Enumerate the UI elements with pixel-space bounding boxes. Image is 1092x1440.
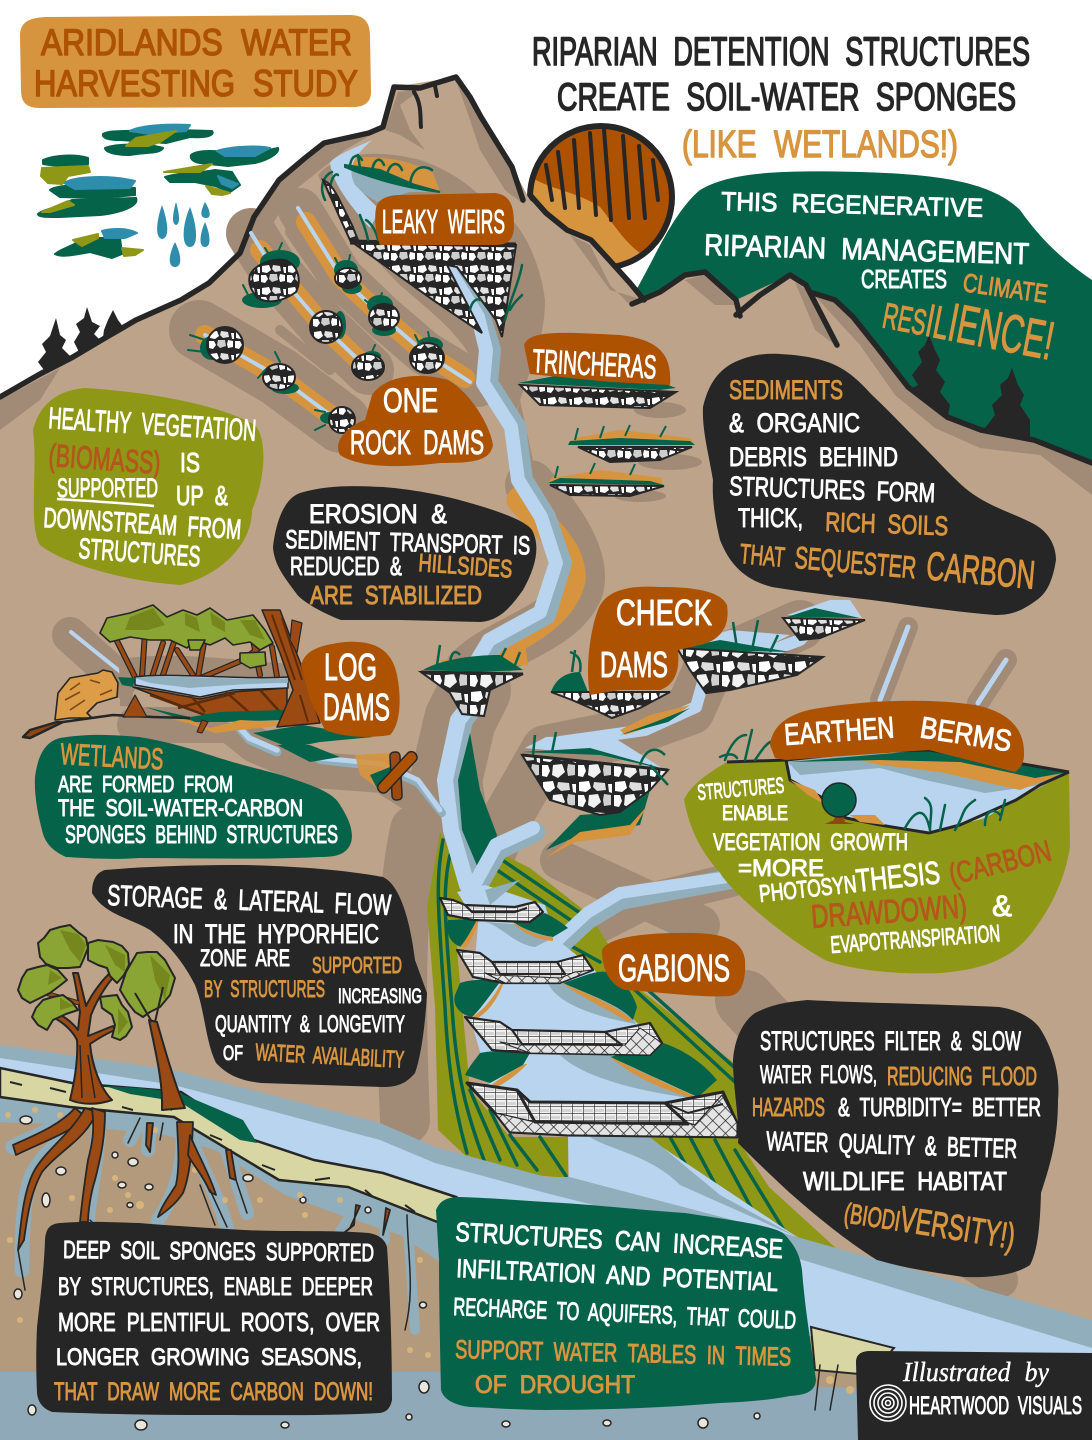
farm field: right side [483, 847, 838, 1250]
panel: this regenerative text: RIPARIAN MANAGEMENT [704, 229, 1030, 271]
tree roots [13, 1108, 838, 1410]
panel: erosion: HILLSIDES [418, 549, 513, 584]
small crossed log dam [355, 750, 419, 800]
panel: infiltration: RECHARGE TO AQUIFERS, THAT COULD [453, 1293, 797, 1335]
main heading [532, 30, 1030, 166]
farm field: left side [427, 832, 568, 1178]
panel: this regenerative text: THIS REGENERATIVE [721, 186, 984, 223]
credit box [856, 1351, 1092, 1440]
panel: healthy vegetation: DOWNSTREAM FROM [43, 502, 242, 545]
panel: structures filter: WATER FLOWS, [760, 1061, 877, 1089]
title badge: HARVESTING STUDY [34, 63, 358, 104]
panel: storage and lateral flow: STORAGE & LATERAL FLOW [107, 880, 392, 922]
panel: vegetation growth text: ENABLE [722, 802, 788, 825]
conifer trees, left ridge [38, 307, 124, 382]
label: log dams: LOG [324, 647, 377, 689]
side streams [71, 627, 1006, 945]
conifer trees, right ridge [905, 335, 1030, 440]
panel: vegetation growth text: VEGETATION GROWTH [713, 829, 908, 856]
panel: vegetation growth text: PHOTOSYNTHESIS [757, 854, 942, 909]
panel: storage and lateral flow: OF [223, 1042, 243, 1065]
panel: storage and lateral flow: INCREASING [338, 985, 422, 1008]
basin shadow bands [485, 880, 797, 1237]
panel: infiltration: INFILTRATION AND POTENTIAL [456, 1253, 779, 1297]
panel: check dams label [588, 587, 728, 695]
earthen berm basin [684, 730, 1070, 973]
panel: storage and lateral flow: QUANTITY & LONGEVITY [215, 1011, 405, 1038]
panel: sediments: RICH SOILS [825, 507, 949, 541]
main river channel [445, 267, 572, 885]
panel: wetlands: ARE FORMED FROM [58, 771, 233, 797]
panel: healthy vegetation: IS [180, 447, 200, 478]
panel: deep soil sponges: LONGER GROWING SEASONS, [56, 1344, 362, 1371]
label: earthen berms [770, 701, 1024, 772]
panel: vegetation growth text: & [992, 890, 1012, 923]
panel: deep soil sponges [36, 1222, 392, 1415]
panel: wetlands: SPONGES BEHIND STRUCTURES [65, 821, 338, 849]
label: log dams [301, 642, 400, 737]
label: log dams: DAMS [323, 687, 390, 729]
label: leaky weirs: LEAKY WEIRS [382, 203, 505, 240]
one rock dams [188, 243, 444, 433]
top stream and grassy bank [322, 140, 440, 228]
panel: infiltration: OF DROUGHT [475, 1371, 635, 1399]
riverbank grass [105, 1086, 257, 1143]
label: one rock dams [338, 376, 493, 466]
soil strip [0, 1068, 894, 1375]
leaky weirs structure [323, 180, 522, 337]
label: gabions: GABIONS [618, 948, 730, 990]
panel: healthy vegetation: SUPPORTED [57, 473, 158, 503]
trincheras terraces [518, 375, 695, 496]
panel: check dams label: DAMS [600, 644, 668, 685]
rain drops [157, 202, 210, 267]
log dam scene with trees and beaver [23, 605, 373, 762]
clouds [38, 125, 278, 258]
green channel tongue [458, 733, 497, 880]
panel: this regenerative text [704, 186, 1059, 372]
panel: erosion: EROSION & [309, 499, 447, 529]
root halos [13, 1112, 415, 1330]
panel: deep soil sponges: DEEP SOIL SPONGES SUPPORTED [63, 1236, 374, 1267]
panel: sediments: THAT SEQUESTER CARBON [738, 528, 1037, 598]
wet soil band [0, 1095, 445, 1262]
title badge [20, 15, 371, 108]
panel: wetlands [35, 735, 352, 859]
panel: deep soil sponges: MORE PLENTIFUL ROOTS, OVER [58, 1307, 380, 1337]
gabion 2 [457, 950, 593, 983]
panel: erosion: REDUCED & [290, 551, 402, 581]
small tree [120, 952, 185, 1110]
label: trincheras: TRINCHERAS [532, 342, 657, 385]
panel: deep soil sponges: BY STRUCTURES, ENABLE DEEPER [58, 1273, 373, 1301]
soil pebbles and dots [14, 1116, 760, 1430]
logo: tree rings [870, 1385, 906, 1421]
main check dam [421, 640, 528, 716]
panel: wetlands: THE SOIL-WATER-CARBON [58, 795, 303, 822]
panel: infiltration [436, 1197, 816, 1410]
gabion 4 [467, 1083, 737, 1137]
large tree [18, 925, 132, 1104]
panel: sediments: THICK, [738, 503, 803, 533]
panel: sediments [703, 354, 1056, 615]
upper check dams [551, 600, 865, 735]
panel: healthy vegetation: STRUCTURES [78, 533, 201, 573]
label: one rock dams: ROCK DAMS [350, 424, 484, 462]
label: gabions [602, 933, 745, 996]
panel: sediments: SEDIMENTS [729, 375, 843, 405]
gabion basin water [457, 885, 797, 1237]
panel: storage and lateral flow: BY STRUCTURES [204, 976, 325, 1003]
panel: healthy vegetation: (BIOMASS) [48, 437, 162, 481]
panel: erosion: ARE STABILIZED [310, 580, 482, 610]
gabion structures [440, 898, 737, 1137]
panel: sediments: DEBRIS BEHIND [729, 442, 898, 472]
panel: infiltration: STRUCTURES CAN INCREASE [455, 1217, 784, 1264]
panel: storage and lateral flow: ZONE ARE [200, 945, 290, 972]
panel: infiltration: SUPPORT WATER TABLES IN TIMES [455, 1334, 791, 1372]
hillside river [0, 1045, 1092, 1360]
label: leaky weirs [375, 193, 514, 245]
label: earthen berms: EARTHEN [783, 711, 895, 752]
panel: structures filter: (BIODIVERSITY!) [842, 1189, 1018, 1257]
gabion 3 [465, 1017, 662, 1055]
ridge lines [0, 77, 1092, 463]
main heading: (LIKE WETLANDS!) [682, 124, 958, 166]
panel: storage and lateral flow: IN THE HYPORHEIC [173, 919, 379, 949]
basin vegetation patches [447, 913, 717, 1098]
panel: sediments: STRUCTURES FORM [729, 471, 936, 508]
label: earthen berms: BERMS [918, 711, 1014, 758]
green sky panel [630, 171, 1092, 490]
panel: vegetation growth text: DRAWDOWN) [810, 887, 968, 935]
lower check dam [522, 732, 668, 858]
panel: this regenerative text: CLIMATE [961, 267, 1050, 309]
panel: vegetation growth text: =MORE [738, 855, 824, 882]
label: one rock dams: ONE [383, 382, 438, 420]
panel: deep soil sponges: THAT DRAW MORE CARBON DOWN! [54, 1378, 373, 1406]
panel: storage and lateral flow: WATER AVAILABILITY [255, 1039, 405, 1074]
panel: vegetation growth text [696, 772, 1055, 959]
credit box: Illustrated by [902, 1357, 1049, 1387]
panel: healthy vegetation [33, 388, 263, 585]
sun [527, 123, 675, 268]
panel: storage and lateral flow: SUPPORTED [312, 952, 402, 978]
panel: healthy vegetation: UP & [176, 480, 228, 511]
one rock dam streams [205, 208, 470, 423]
groundwater [0, 1372, 900, 1440]
panel: storage and lateral flow [92, 865, 427, 1087]
panel: vegetation growth text: STRUCTURES [696, 772, 785, 805]
label: trincheras [524, 333, 670, 385]
panel: erosion: SEDIMENT TRANSPORT IS [285, 524, 531, 560]
panel: sediments: & ORGANIC [729, 408, 860, 438]
panel: structures filter: WILDLIFE HABITAT [803, 1166, 1007, 1196]
panel: structures filter: HAZARDS [752, 1092, 825, 1122]
panel: erosion [273, 486, 536, 622]
panel: wetlands: WETLANDS [60, 738, 164, 776]
title badge: ARIDLANDS WATER [41, 22, 352, 63]
panel: structures filter [733, 1000, 1058, 1277]
underground soil [0, 1090, 900, 1440]
panel: check dams label: CHECK [616, 592, 712, 633]
ridge shading and valleys [0, 80, 1092, 495]
panel: healthy vegetation: HEALTHY VEGETATION [48, 402, 257, 448]
gabion 1 [440, 898, 543, 922]
panel: vegetation growth text: (CARBON [946, 835, 1055, 892]
panel: this regenerative text: CREATES [861, 264, 947, 294]
